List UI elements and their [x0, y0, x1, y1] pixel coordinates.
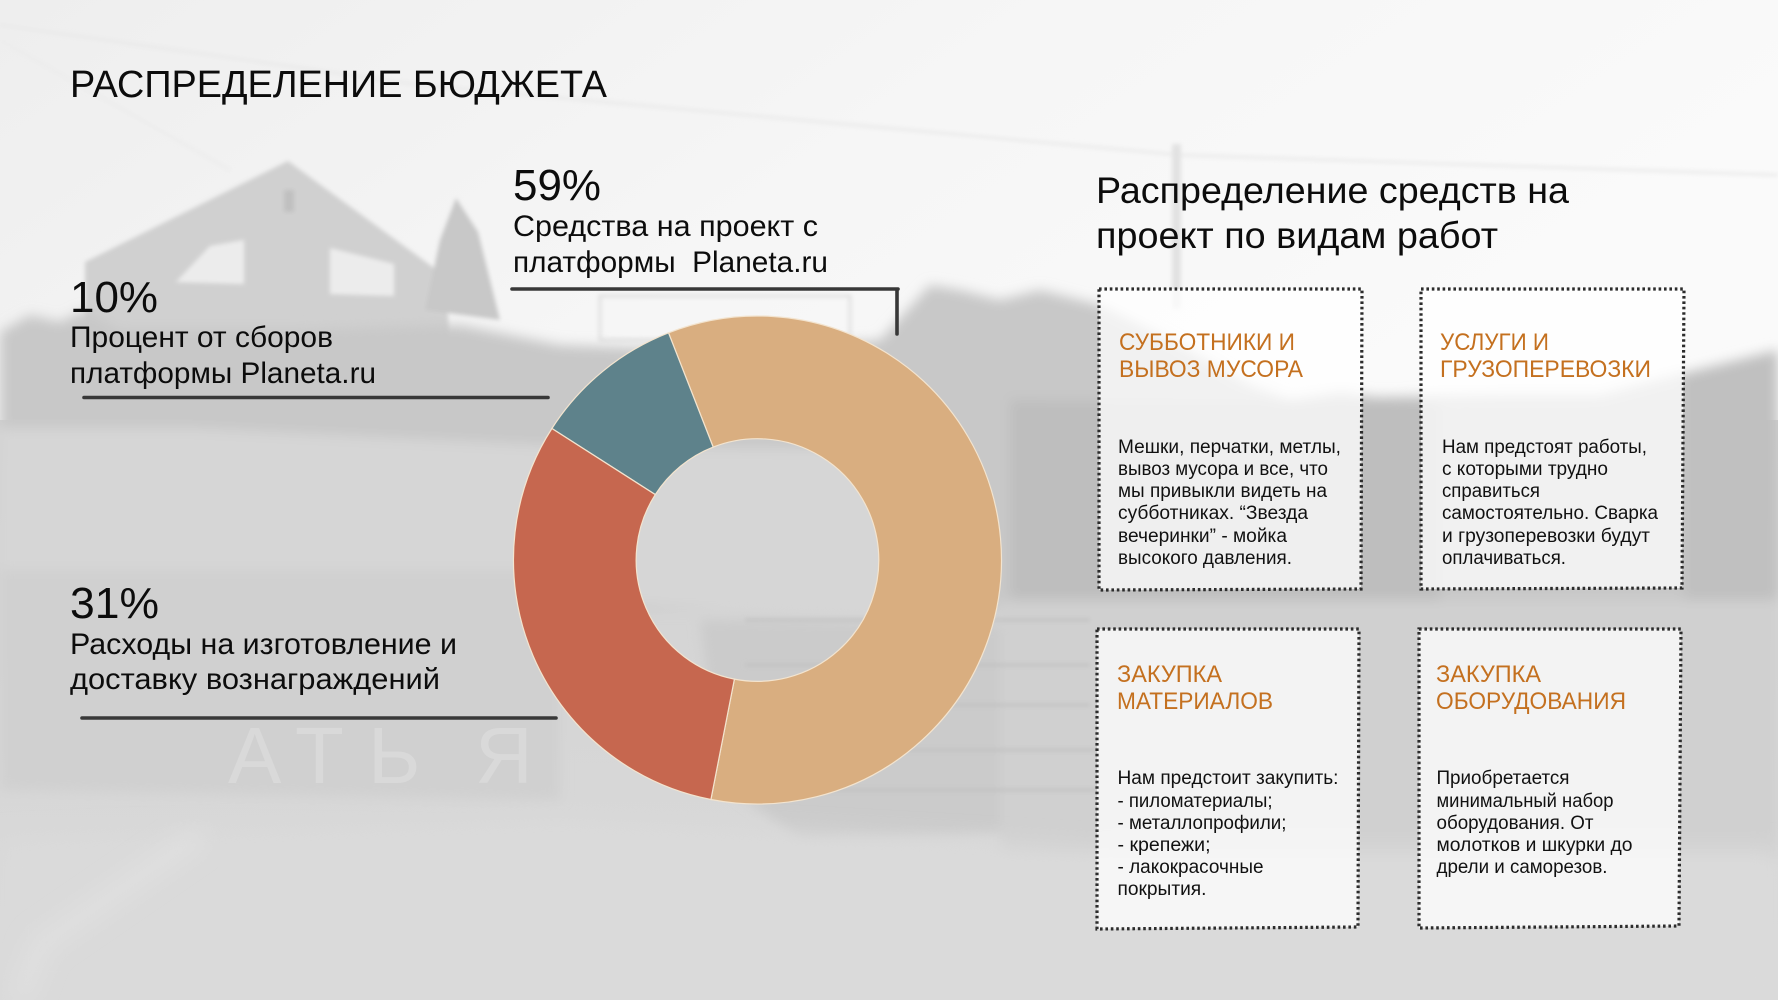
- panel: equipment purchase: Приобретается: [1436, 768, 1570, 789]
- panel: materials purchase: - лакокрасочные: [1118, 857, 1264, 878]
- panel: cleanup and waste removal: Мешки, перчатки, метлы,: [1118, 437, 1341, 458]
- panel: services and freight: самостоятельно. Сварка: [1442, 503, 1658, 524]
- panel: services and freight: Нам предстоят работы,: [1442, 437, 1647, 458]
- callout: 10%: [70, 273, 548, 398]
- panel: equipment purchase: оборудования. От: [1436, 813, 1594, 834]
- callout: 10%: Процент от сборов: [70, 321, 333, 354]
- panel: services and freight: УСЛУГИ И: [1440, 329, 1549, 356]
- callout: 59%: [512, 161, 898, 334]
- callout: 59%: Средства на проект с: [513, 210, 818, 243]
- panel: cleanup and waste removal: высокого давления.: [1118, 548, 1292, 569]
- panel: materials purchase: [1097, 629, 1359, 929]
- callout: 31%: [70, 579, 556, 718]
- callout: 10%: платформы Planeta.ru: [70, 357, 376, 390]
- panel: services and freight: [1421, 289, 1684, 589]
- panel: equipment purchase: [1419, 629, 1681, 928]
- panel: cleanup and waste removal: СУББОТНИКИ И: [1119, 329, 1295, 356]
- panel: cleanup and waste removal: [1099, 289, 1362, 590]
- panel: materials purchase: - крепежи;: [1118, 835, 1210, 856]
- callout: 31%: доставку вознаграждений: [70, 663, 440, 696]
- callout: 10%: 10%: [70, 273, 158, 322]
- panel: cleanup and waste removal: вечеринки” - мойка: [1118, 526, 1287, 547]
- panel: materials purchase: покрытия.: [1118, 879, 1206, 900]
- panel: services and freight: с которыми трудно: [1442, 459, 1608, 480]
- callout: 31%: Расходы на изготовление и: [70, 628, 457, 661]
- slice: 10% platform fee: [552, 333, 713, 495]
- subheading: проект по видам работ: [1096, 215, 1498, 256]
- panel: equipment purchase: ОБОРУДОВАНИЯ: [1436, 688, 1626, 715]
- panel: cleanup and waste removal: вывоз мусора и все, что: [1118, 459, 1328, 480]
- slice: 59% project funds: [668, 316, 1001, 804]
- panel: equipment purchase: минимальный набор: [1436, 791, 1614, 812]
- panel: cleanup and waste removal: субботниках. “Звезда: [1118, 503, 1308, 524]
- panel: materials purchase: - пиломатериалы;: [1118, 791, 1272, 812]
- panel: services and freight: справиться: [1442, 481, 1540, 502]
- donut chart: [513, 316, 1001, 804]
- panel: materials purchase: ЗАКУПКА: [1117, 661, 1222, 688]
- callout: 59%: платформы Planeta.ru: [513, 246, 828, 279]
- panel: materials purchase: Нам предстоит закупить:: [1118, 768, 1338, 789]
- panel: equipment purchase: ЗАКУПКА: [1436, 661, 1541, 688]
- panel: services and freight: ГРУЗОПЕРЕВОЗКИ: [1440, 356, 1651, 383]
- panel: equipment purchase: молотков и шкурки до: [1436, 835, 1632, 856]
- panel: equipment purchase: дрели и саморезов.: [1436, 857, 1608, 878]
- panel: cleanup and waste removal: ВЫВОЗ МУСОРА: [1119, 356, 1303, 383]
- panel: services and freight: и грузоперевозки будут: [1442, 526, 1650, 547]
- background photo: АТЬЯ: [228, 711, 533, 800]
- panel: materials purchase: - металлопрофили;: [1118, 813, 1286, 834]
- subheading: [1096, 170, 1569, 256]
- callout: 59%: 59%: [513, 161, 601, 210]
- subheading: Распределение средств на: [1096, 170, 1569, 211]
- panel: services and freight: оплачиваться.: [1442, 548, 1566, 569]
- title: РАСПРЕДЕЛЕНИЕ БЮДЖЕТА: [70, 64, 608, 106]
- panel: materials purchase: МАТЕРИАЛОВ: [1117, 688, 1273, 715]
- slice: 31% rewards: [513, 428, 734, 800]
- panel: cleanup and waste removal: мы привыкли видеть на: [1118, 481, 1327, 502]
- callout: 31%: 31%: [70, 579, 159, 628]
